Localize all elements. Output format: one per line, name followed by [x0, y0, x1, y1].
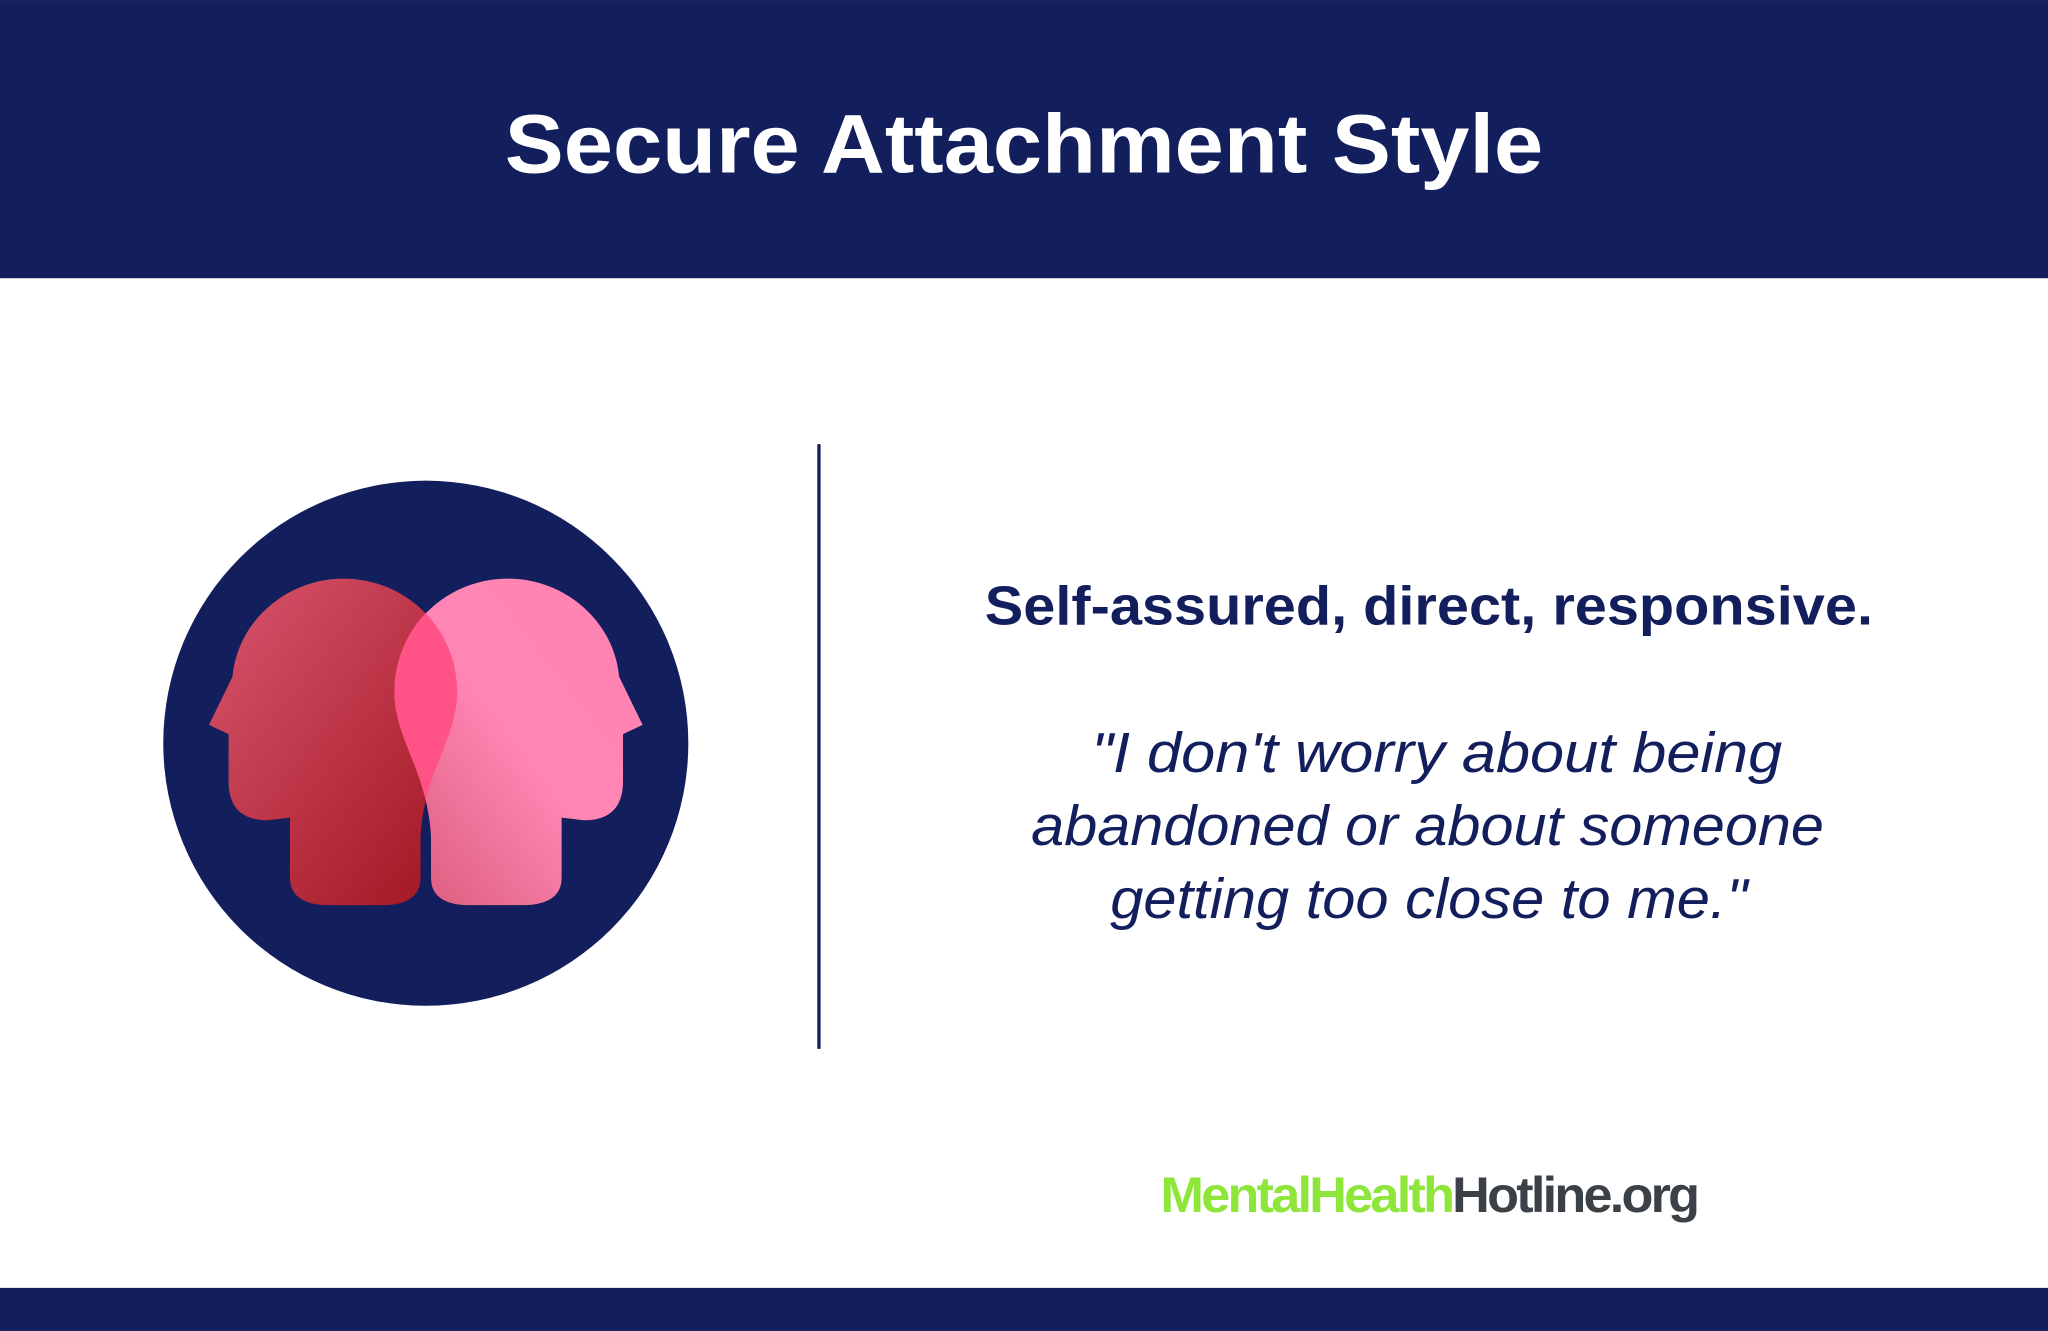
- icon: two heads in circle: [163, 481, 688, 1006]
- logo: MentalHealth Hotline.org: [1160, 1167, 1697, 1223]
- subtitle: Self-assured, direct, responsive.: [985, 574, 1873, 636]
- quote: "I don't worry about being: [1091, 721, 1782, 784]
- quote: [1031, 721, 1824, 930]
- quote: abandoned or about someone: [1031, 794, 1824, 857]
- header bar: [0, 0, 2048, 278]
- divider: [818, 444, 820, 1049]
- title: Secure Attachment Style: [505, 96, 1543, 190]
- quote: getting too close to me.": [1110, 867, 1751, 930]
- footer bar: [0, 1288, 2048, 1331]
